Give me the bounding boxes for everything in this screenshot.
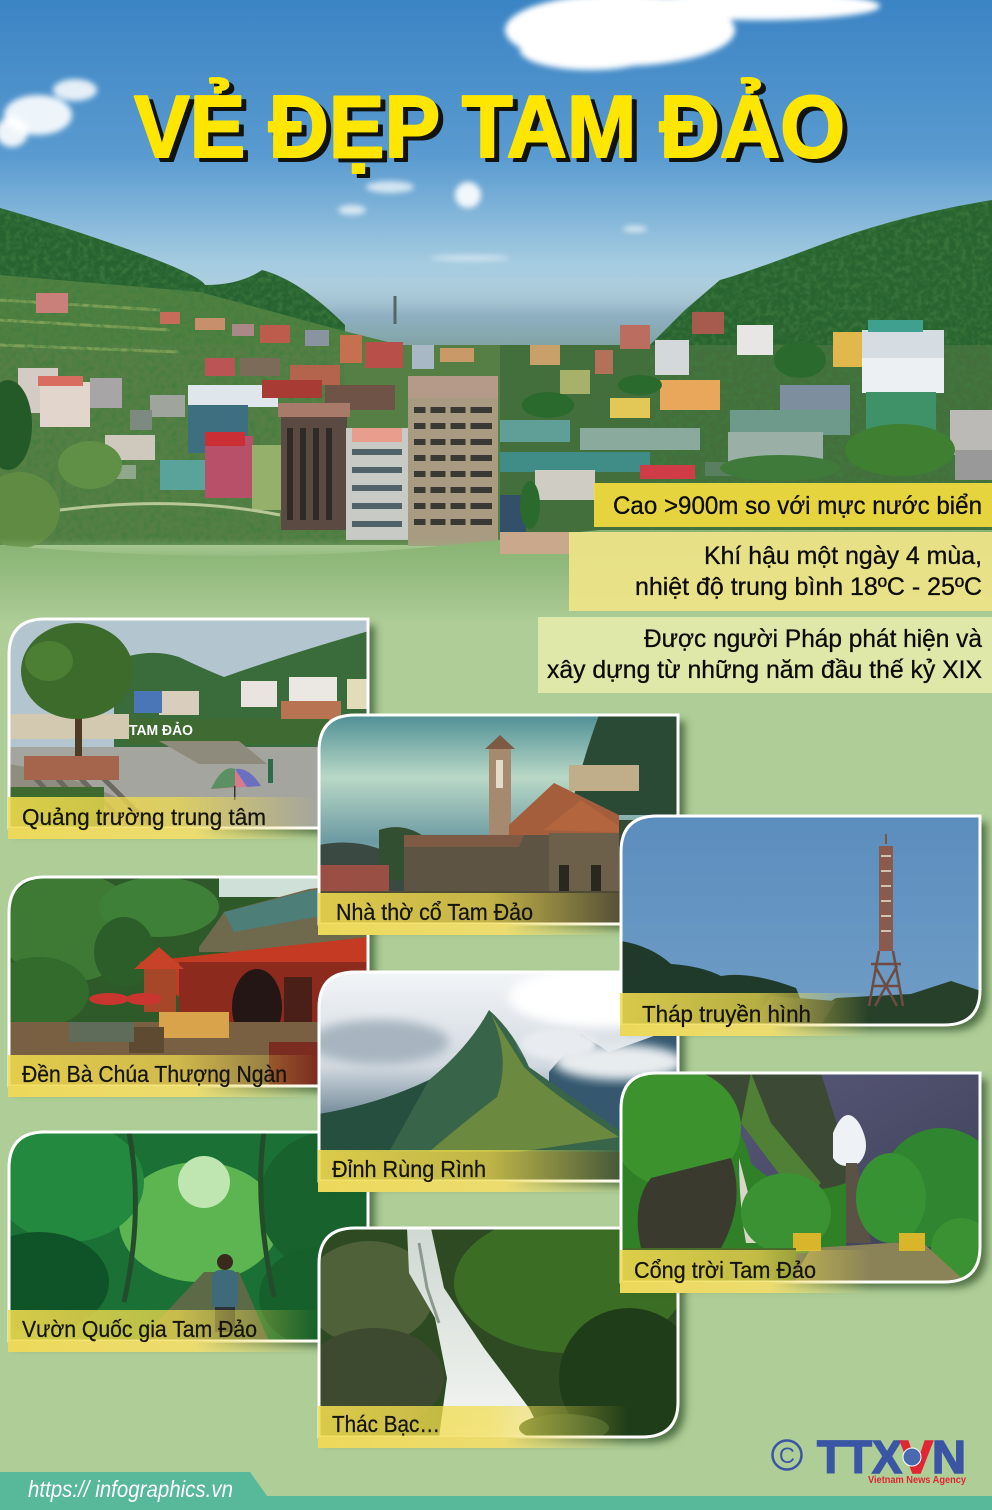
- left town: [18, 293, 474, 510]
- logo: TTXVN: N: [932, 1431, 966, 1483]
- icon: copyright: C: [779, 1443, 795, 1468]
- icon: tower: [869, 834, 903, 1006]
- photo: temple: [0, 872, 369, 1086]
- info box: climate: nhiệt độ trung bình 18ºC - 25ºC: [635, 573, 982, 601]
- photo: square: [9, 619, 369, 828]
- logo: TTXVN: V: [900, 1431, 933, 1483]
- right town: [500, 312, 992, 535]
- info box: climate: [569, 532, 992, 611]
- caption: Tháp truyền hình: [642, 1001, 811, 1027]
- caption: Thác Bạc…: [332, 1411, 440, 1437]
- panel: Vườn Quốc gia Tam Đảo: [0, 1122, 399, 1352]
- info box: climate: Khí hậu một ngày 4 mùa,: [704, 542, 982, 570]
- photo: waterfall: [320, 1230, 676, 1436]
- logo: TTXVN: Vietnam News Agency: [868, 1475, 966, 1486]
- panel: Quảng trường trung tâm: [8, 619, 369, 839]
- caption: Nhà thờ cổ Tam Đảo: [336, 899, 533, 925]
- panel: Nhà thờ cổ Tam Đảo: [318, 715, 679, 935]
- caption: Đền Bà Chúa Thượng Ngàn: [22, 1061, 287, 1087]
- field fading into page: [0, 530, 992, 620]
- title: VẺ ĐẸP TAM ĐẢO: [139, 81, 850, 180]
- photo: TV tower: [621, 816, 981, 1025]
- photo: heaven gate: [622, 1074, 978, 1280]
- info box: altitude: Cao >900m so với mực nước biển: [613, 492, 982, 520]
- panel: Đền Bà Chúa Thượng Ngàn: [0, 872, 369, 1097]
- photo: mountain peak: [309, 967, 689, 1181]
- panel: Cổng trời Tam Đảo: [611, 1068, 992, 1293]
- caption: Quảng trường trung tâm: [22, 804, 266, 830]
- info box: history: [538, 617, 992, 693]
- icon: copyright: [772, 1440, 802, 1470]
- photo: square: TAM ĐẢO: [129, 722, 193, 739]
- photo: church: [319, 715, 679, 924]
- caption: Đỉnh Rùng Rình: [332, 1156, 486, 1182]
- photo: forest: [10, 1134, 366, 1340]
- caption: Vườn Quốc gia Tam Đảo: [22, 1316, 257, 1342]
- panel: Đỉnh Rùng Rình: [309, 967, 689, 1192]
- url: https:// infographics.vn: [28, 1476, 233, 1502]
- caption: Cổng trời Tam Đảo: [634, 1257, 816, 1283]
- info box: history: Được người Pháp phát hiện và: [644, 625, 982, 653]
- panel: Thác Bạc: [318, 1226, 691, 1449]
- logo: TTXVN: [772, 1431, 966, 1486]
- logo: TTXVN: TTX: [817, 1431, 902, 1483]
- footer bar with URL tab: [0, 1472, 992, 1510]
- central towers: [278, 296, 498, 546]
- header landscape photo: [0, 0, 992, 623]
- info box: altitude: [594, 483, 992, 527]
- title: VẺ ĐẸP TAM ĐẢO: [134, 77, 845, 176]
- panel: Tháp truyền hình: [620, 816, 981, 1036]
- info box: history: xây dựng từ những năm đầu thế kỷ XIX: [547, 656, 982, 684]
- hill foliage texture: [0, 200, 992, 545]
